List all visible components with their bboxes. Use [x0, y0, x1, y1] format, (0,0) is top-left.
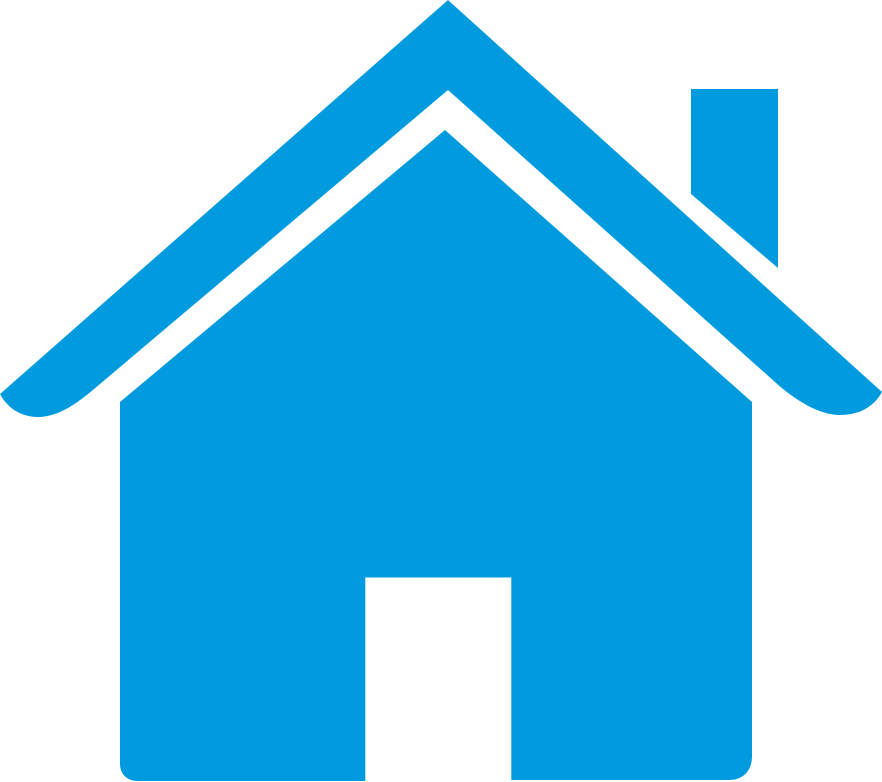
roof — [0, 0, 882, 417]
chimney — [691, 89, 778, 268]
roof and chimney — [0, 0, 882, 417]
house body with door — [120, 130, 752, 781]
